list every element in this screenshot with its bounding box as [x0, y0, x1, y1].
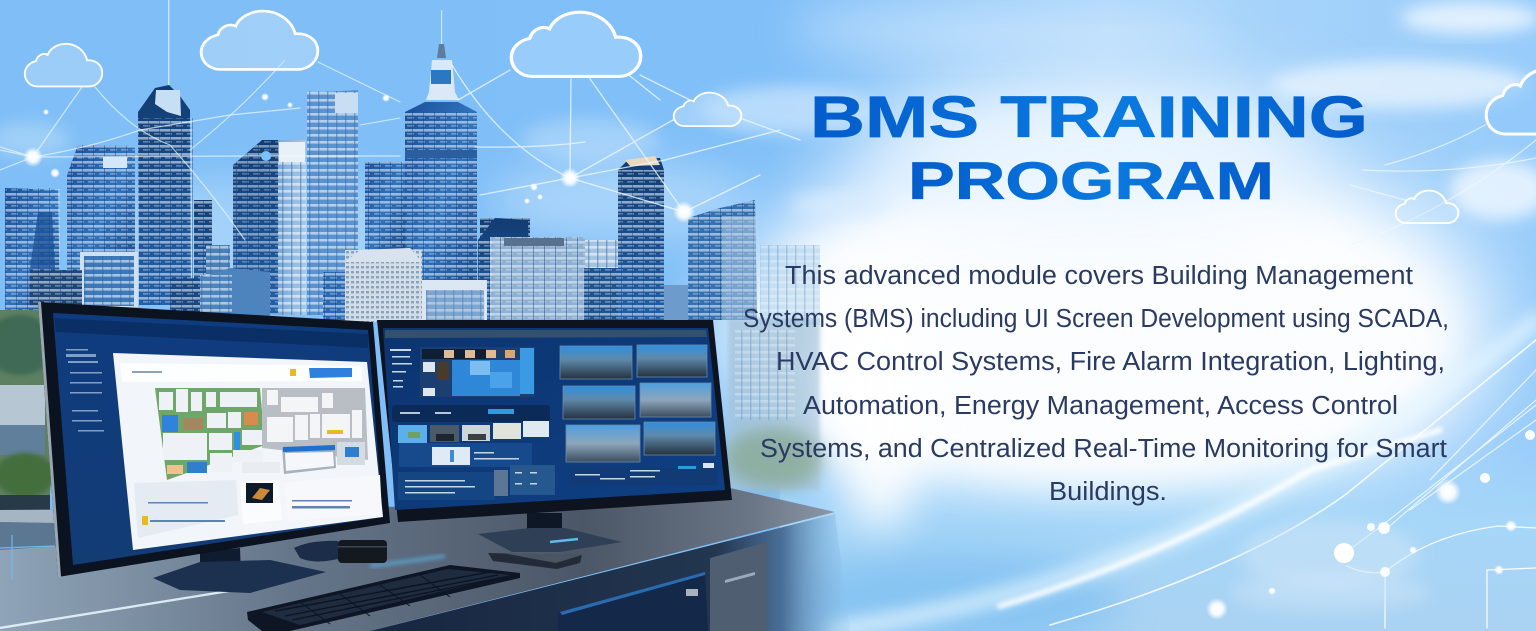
desk [0, 488, 835, 631]
tower 2 [67, 145, 135, 300]
body paragraph: Systems, and Centralized Real-Time Monitoring for Smart [760, 435, 1447, 463]
screen: camera feeds [560, 345, 715, 462]
body paragraph: HVAC Control Systems, Fire Alarm Integration, Lighting, [776, 348, 1445, 376]
cloud icon 3 [511, 12, 641, 76]
tower 4 [233, 140, 306, 315]
skyline of office towers [5, 0, 757, 322]
cloud icon 5 [1486, 69, 1536, 134]
screen: search bar and button [120, 363, 362, 382]
right monitor [377, 320, 732, 522]
screen: floor plan, green zone [155, 388, 265, 480]
desk cabinet [370, 514, 850, 631]
right monitor stand [478, 513, 622, 552]
title [810, 85, 1368, 211]
screen: media wall [420, 347, 535, 397]
tower 3 with spire [138, 0, 193, 305]
faded city and trees behind text [725, 245, 930, 530]
screen: sidebar menu [66, 349, 104, 432]
low-rise buildings [30, 248, 487, 322]
body paragraph: Automation, Energy Management, Access Control [803, 392, 1398, 420]
tower 1 [5, 188, 60, 310]
cloud icon 6 [1396, 191, 1458, 223]
tower 6 with crown and spire [405, 10, 477, 310]
scenery left of monitor [0, 310, 55, 511]
screen: thumbnail row [398, 421, 549, 443]
cloud icon 4 [674, 93, 741, 126]
light streaks and data nodes, lower right [830, 320, 1536, 631]
screen: toolbar [392, 405, 550, 422]
title: BMS TRAINING [810, 85, 1368, 150]
tower group: rear [194, 162, 688, 320]
left monitor [38, 302, 390, 577]
tower 9 [618, 156, 664, 320]
keyboard [247, 565, 520, 631]
body paragraph: Systems (BMS) including UI Screen Development using SCADA, [743, 305, 1449, 333]
screen: lower panels [398, 443, 717, 500]
screen: lower widgets [134, 475, 382, 538]
cloud icon 2 [201, 11, 318, 69]
title: PROGRAM [908, 152, 1274, 211]
network nodes [23, 93, 695, 223]
tower 8 [584, 268, 646, 320]
glowing dots, lower right [1206, 430, 1535, 620]
screen: white dashboard panel [113, 353, 383, 550]
body paragraph [743, 262, 1449, 506]
left monitor stand [153, 548, 326, 593]
body paragraph: Buildings. [1049, 478, 1167, 506]
speaker on desk [294, 540, 387, 563]
screen: title bar [385, 330, 707, 338]
tower 5 [307, 90, 358, 315]
tower 10 [688, 200, 757, 320]
screen: top bars [54, 318, 368, 348]
screen: wide blue-topped rooms [242, 442, 365, 474]
network lines connecting clouds and nodes [0, 60, 1536, 245]
screen: sidebar [390, 349, 412, 388]
body paragraph: This advanced module covers Building Management [785, 262, 1413, 290]
media hub on desk [488, 553, 582, 569]
tower 7 [478, 218, 585, 320]
cloud icon 1 [25, 44, 102, 86]
screen: floor plan, grey zone [262, 388, 368, 460]
